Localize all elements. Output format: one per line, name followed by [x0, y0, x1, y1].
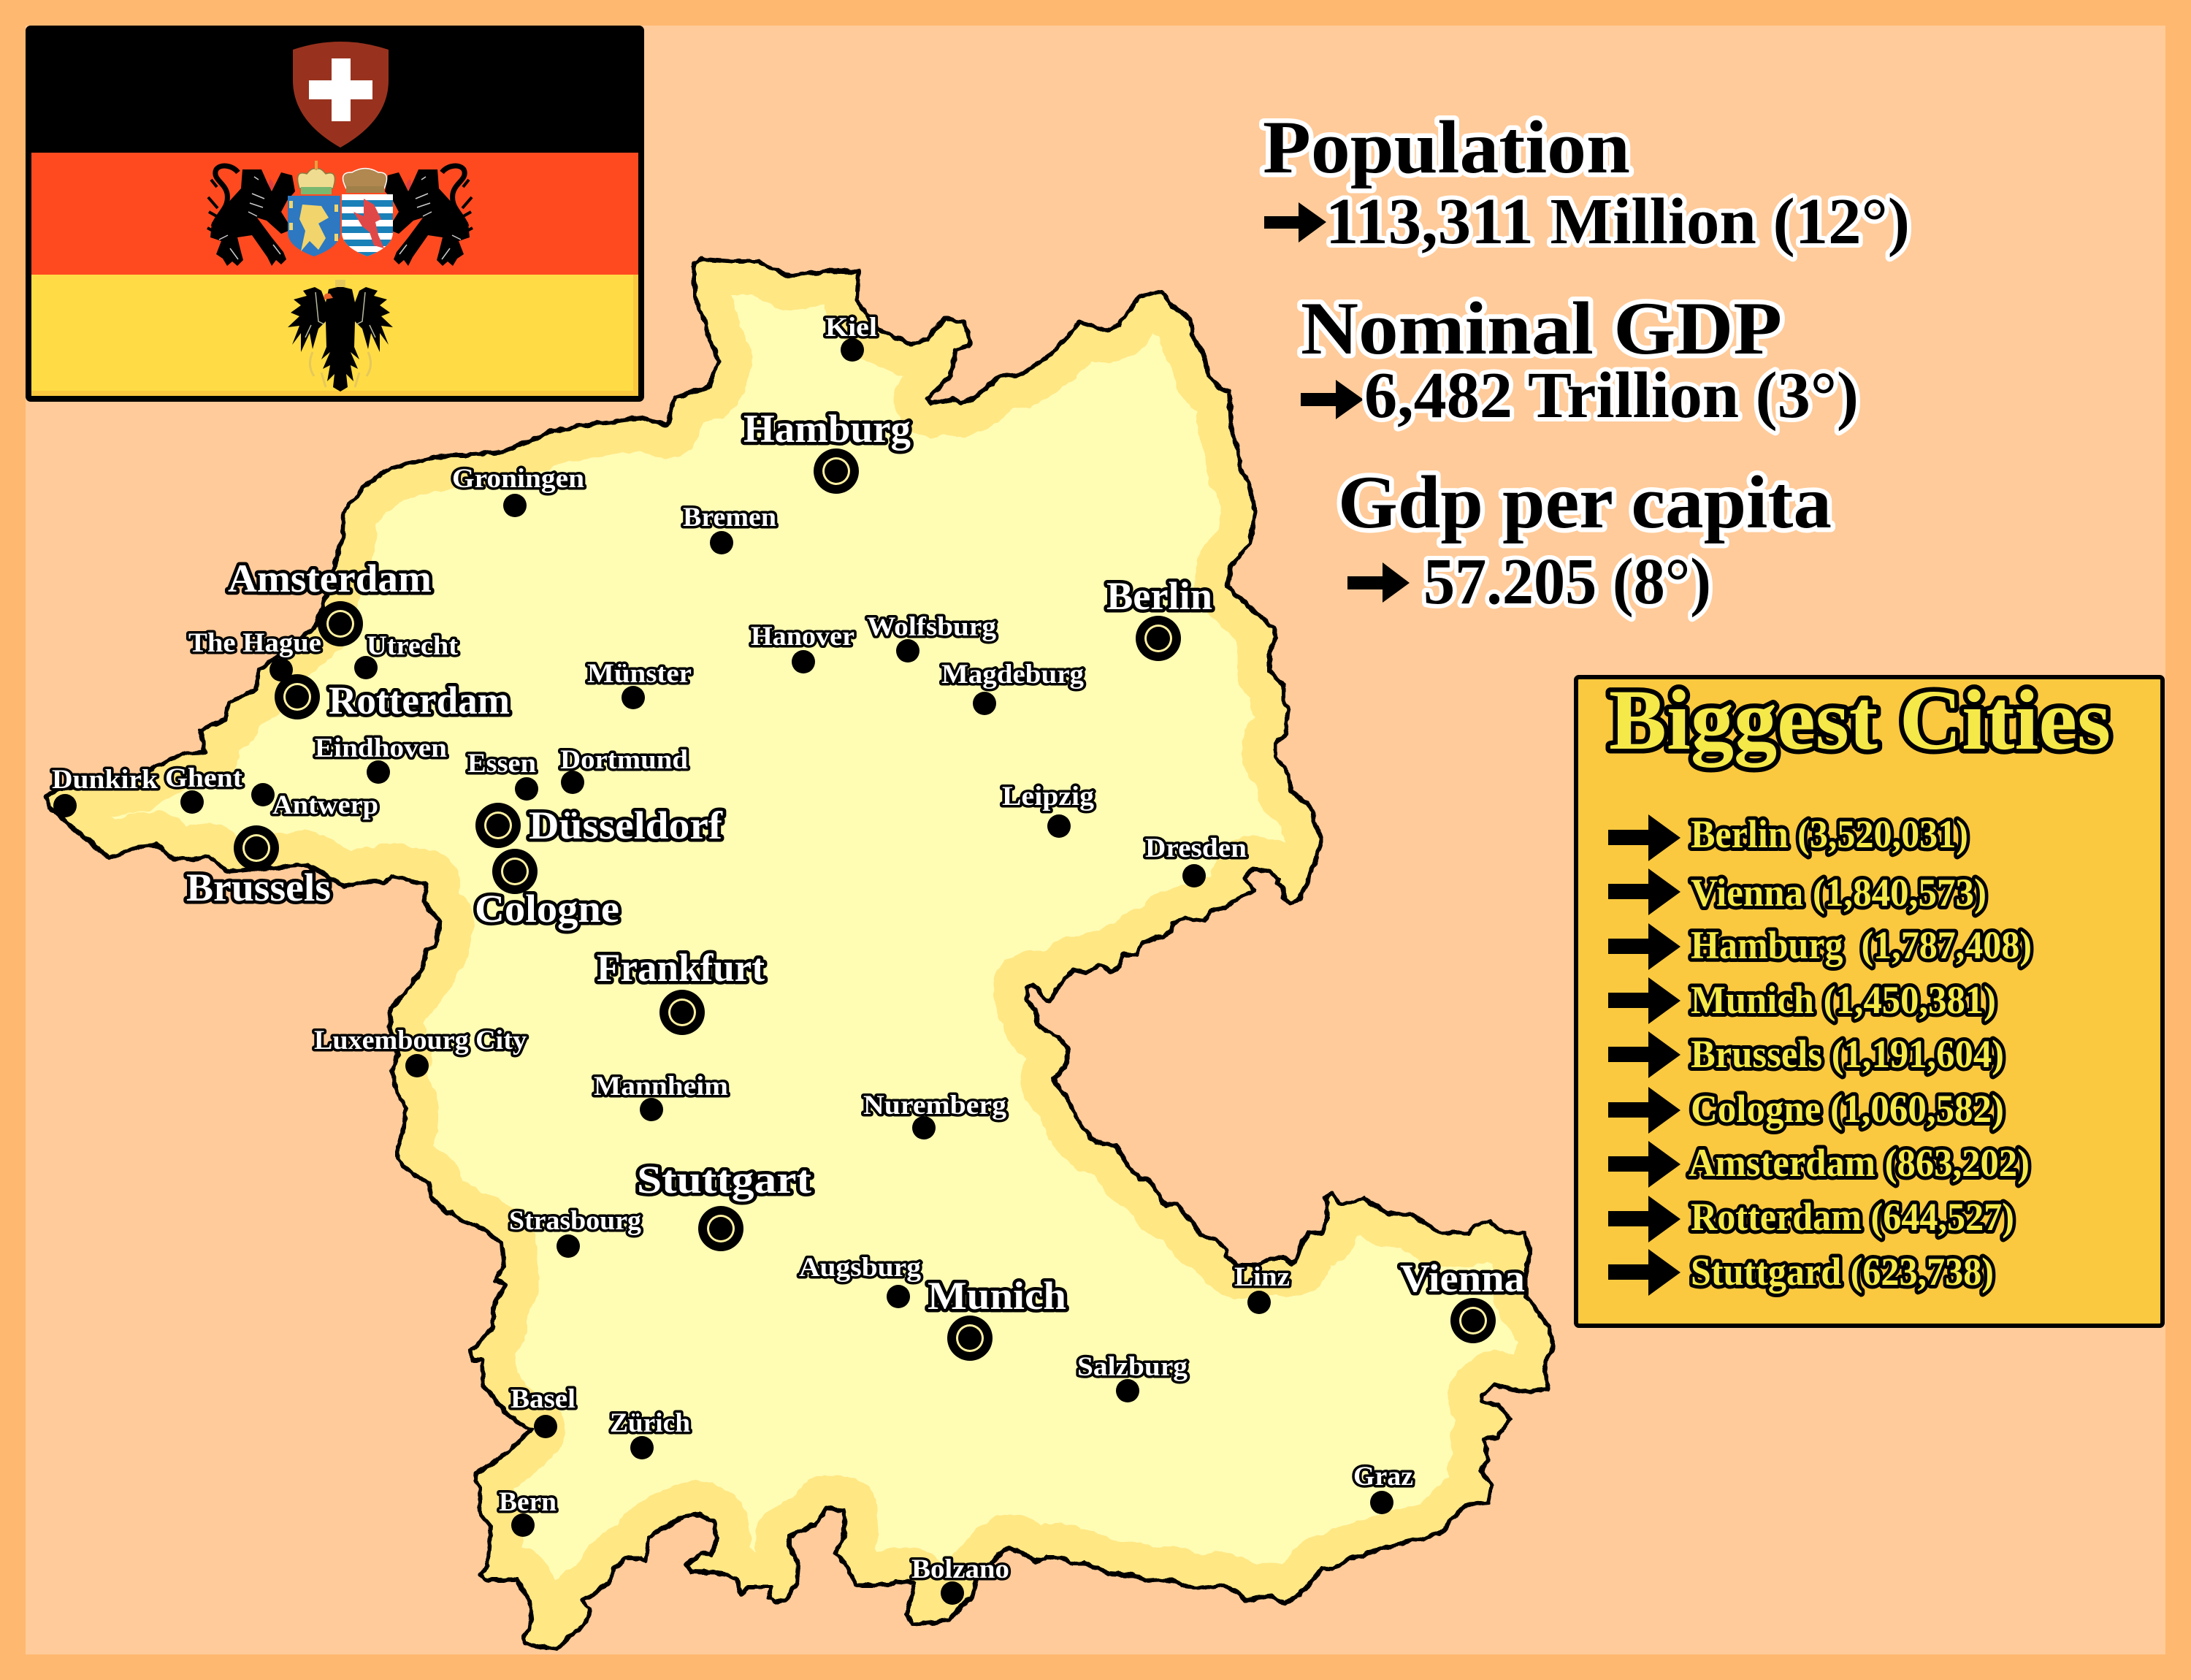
- row: Stuttgard: Stuttgard (623,738): [1691, 1250, 1994, 1294]
- city: Dunkirk: [52, 765, 158, 817]
- row: Hamburg: Hamburg (1,787,408): [1691, 923, 2032, 967]
- major city: Stuttgart: [637, 1158, 811, 1251]
- row: Cologne: Cologne (1,060,582): [1691, 1087, 2004, 1131]
- city: Mannheim: [594, 1072, 728, 1121]
- major city: Stuttgart: Stuttgart: [637, 1158, 811, 1202]
- major city: Frankfurt: Frankfurt: [597, 946, 765, 990]
- city: Nuremberg: [863, 1091, 1007, 1139]
- city: Basel: Basel: [511, 1384, 576, 1414]
- panel title: Biggest Cities: [1609, 672, 2111, 768]
- city: Basel: [511, 1384, 576, 1438]
- icon: eagle: [288, 280, 393, 392]
- flag with coats of arms: [26, 26, 644, 402]
- city: Dunkirk: Dunkirk: [52, 765, 158, 795]
- city: Strasbourg: Strasbourg: [509, 1206, 641, 1236]
- city: Augsburg: [799, 1253, 922, 1308]
- city: The Hague: [188, 628, 321, 681]
- city: Groningen: [452, 464, 584, 517]
- city: Nuremberg: Nuremberg: [863, 1091, 1007, 1120]
- city: Zürich: [610, 1408, 690, 1459]
- major city: Rotterdam: [275, 674, 510, 722]
- city: Eindhoven: [315, 733, 447, 784]
- heading: population: Population: [1263, 106, 1630, 189]
- city: Ghent: [165, 763, 243, 814]
- major city: Hamburg: Hamburg: [743, 407, 911, 451]
- icon: dutch shield: [288, 196, 340, 256]
- city: Dresden: Dresden: [1145, 833, 1247, 863]
- major city: Vienna: Vienna: [1400, 1256, 1525, 1300]
- city: Utrecht: Utrecht: [367, 631, 459, 661]
- major city: Hamburg: [743, 407, 911, 494]
- major city: Munich: [928, 1274, 1066, 1361]
- city: Utrecht: [354, 631, 459, 679]
- city: Kiel: Kiel: [825, 313, 877, 343]
- row: Amsterdam: Amsterdam (863,202): [1689, 1141, 2030, 1185]
- city: Mannheim: Mannheim: [594, 1072, 728, 1101]
- city: Dortmund: Dortmund: [560, 745, 688, 775]
- city: Strasbourg: [509, 1206, 641, 1258]
- row: Berlin: [1608, 812, 1968, 861]
- icon: luxembourg shield: [342, 194, 393, 259]
- city: The Hague: The Hague: [188, 628, 321, 658]
- city: Leipzig: [1002, 782, 1095, 838]
- city: Eindhoven: Eindhoven: [315, 733, 447, 763]
- city: Leipzig: Leipzig: [1002, 782, 1095, 812]
- major city: Frankfurt: [597, 946, 765, 1035]
- row: Vienna: Vienna (1,840,573): [1691, 871, 1987, 915]
- city: Münster: [587, 659, 692, 709]
- city: Linz: Linz: [1234, 1262, 1290, 1292]
- city: Wolfsburg: [867, 612, 997, 663]
- icon: dutch crown: [298, 161, 334, 194]
- major city: Amsterdam: [228, 557, 432, 646]
- major city: Berlin: Berlin: [1106, 574, 1212, 618]
- gdp value with arrow: 6,482 Trillion (3°): [1364, 359, 1859, 432]
- population value with arrow: 113,311 Million (12°): [1326, 186, 1910, 258]
- major city: Amsterdam: Amsterdam: [228, 557, 432, 600]
- city: Zürich: Zürich: [610, 1408, 690, 1438]
- city: Münster: Münster: [587, 659, 692, 689]
- city: Graz: [1353, 1462, 1413, 1514]
- row: Brussels: Brussels (1,191,604): [1691, 1032, 2004, 1076]
- row: Rotterdam: [1608, 1195, 2014, 1242]
- city: Luxembourg City: [314, 1026, 527, 1077]
- city: Dresden: [1145, 833, 1247, 887]
- row: Stuttgard: [1608, 1249, 1994, 1296]
- heading: gdp per capita: Gdp per capita: [1338, 461, 1832, 544]
- city: Augsburg: Augsburg: [799, 1253, 922, 1283]
- city: Magdeburg: Magdeburg: [941, 660, 1085, 690]
- major city: Munich: Munich: [928, 1274, 1066, 1318]
- city: Magdeburg: [941, 660, 1085, 715]
- major city: Cologne: [475, 849, 619, 931]
- city: Salzburg: [1077, 1352, 1188, 1402]
- row: Rotterdam: Rotterdam (644,527): [1691, 1195, 2014, 1239]
- city: Bremen: Bremen: [683, 503, 776, 532]
- major city: Brussels: [186, 825, 331, 909]
- map of the country with coastal band and border: [47, 259, 1553, 1649]
- city: Bern: [499, 1487, 557, 1537]
- row: Munich: Munich (1,450,381): [1691, 978, 1996, 1022]
- city: Graz: Graz: [1353, 1462, 1413, 1492]
- panel: biggest cities: [1576, 672, 2163, 1326]
- city: Ghent: Ghent: [165, 763, 243, 793]
- icon: right lion supporter: [384, 166, 473, 266]
- city: Antwerp: [251, 783, 378, 820]
- city: Salzburg: Salzburg: [1077, 1352, 1188, 1382]
- city: Antwerp: Antwerp: [272, 790, 378, 820]
- major city: Vienna: [1400, 1256, 1525, 1343]
- city: Dortmund: [560, 745, 688, 794]
- icon: luxembourg crown: [343, 168, 387, 193]
- city: Wolfsburg: Wolfsburg: [867, 612, 997, 642]
- city: Bern: Bern: [499, 1487, 557, 1517]
- major city: Rotterdam: Rotterdam: [329, 679, 510, 722]
- city: Bolzano: Bolzano: [911, 1554, 1009, 1584]
- city: Hanover: [751, 622, 854, 673]
- major city: Cologne: Cologne: [475, 887, 619, 931]
- gdp per capita value with arrow: 57.205 (8°): [1423, 546, 1711, 618]
- city: Kiel: [825, 313, 877, 362]
- city: Linz: [1234, 1262, 1290, 1314]
- major city: Düsseldorf: Düsseldorf: [529, 803, 723, 847]
- city: Essen: Essen: [467, 749, 536, 779]
- icon: left lion supporter: [207, 166, 296, 266]
- city: Essen: [467, 749, 538, 801]
- row: Berlin: Berlin (3,520,031): [1691, 812, 1968, 856]
- major city: Berlin: [1106, 574, 1212, 661]
- heading: nominal gdp: Nominal GDP: [1301, 287, 1782, 370]
- city: Luxembourg City: Luxembourg City: [314, 1026, 527, 1055]
- city: Bolzano: [911, 1554, 1009, 1605]
- icon: swiss shield: [293, 42, 389, 148]
- city: Groningen: Groningen: [452, 464, 584, 494]
- city: Hanover: Hanover: [751, 622, 854, 652]
- city: Bremen: [683, 503, 776, 554]
- major city: Brussels: Brussels: [186, 866, 331, 909]
